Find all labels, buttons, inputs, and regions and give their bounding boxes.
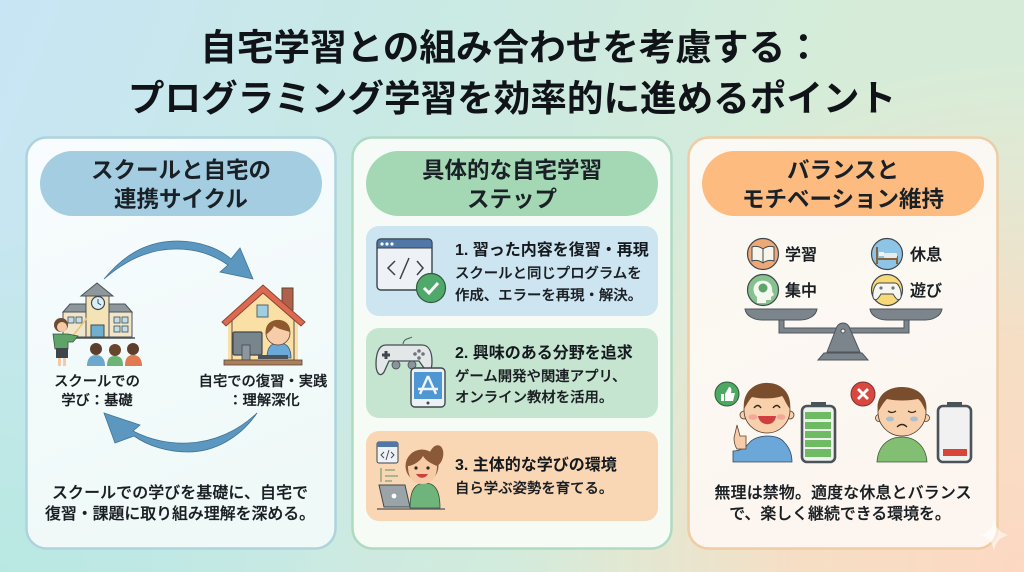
card: step 3 <box>366 431 658 521</box>
arrow: school to home <box>104 241 253 279</box>
label: play: 遊び <box>910 282 942 300</box>
label: review at home: ：理解深化 <box>228 392 300 409</box>
text: balance summary: で、楽しく継続できる環境を。 <box>729 505 951 523</box>
heading pill: cycle: 連携サイクル <box>114 187 248 212</box>
label: learning at school <box>54 373 140 409</box>
text: balance summary <box>714 484 972 523</box>
text: cycle summary: スクールでの学びを基礎に、自宅で <box>52 484 308 502</box>
icon: focus head <box>748 274 778 306</box>
icon: study book <box>748 238 778 270</box>
figure: tired child with low battery <box>851 382 971 462</box>
label: study: 学習 <box>785 246 817 264</box>
panel: balance and motivation <box>688 138 998 548</box>
text: step 1: 1. 習った内容を復習・再現 <box>455 240 649 259</box>
heading pill: steps <box>366 151 658 216</box>
icon: home study <box>222 285 305 365</box>
text: step 2: 2. 興味のある分野を追求 <box>455 343 633 362</box>
text: step 2: オンライン教材を活用。 <box>455 389 613 406</box>
icon: girl with laptop <box>377 442 446 509</box>
heading pill: balance <box>702 151 984 216</box>
card: step 2 <box>366 328 658 418</box>
label: learning at school: スクールでの <box>54 373 140 390</box>
label: learning at school: 学び：基礎 <box>61 392 133 409</box>
text: step 1 <box>455 240 649 304</box>
heading pill: balance: バランスと <box>787 158 899 183</box>
card: step 1 <box>366 226 658 316</box>
text: step 2 <box>455 343 633 406</box>
icon: school with teacher and students <box>53 283 142 366</box>
heading pill: cycle <box>40 151 322 216</box>
text: step 3: 3. 主体的な学びの環境 <box>455 455 617 474</box>
icon: rest bed <box>872 238 902 270</box>
text: cycle summary <box>45 484 315 523</box>
arrow: home to school <box>104 413 257 452</box>
label: focus: 集中 <box>785 282 817 300</box>
icon: play controller <box>872 274 902 306</box>
label: review at home: 自宅での復習・実践 <box>199 373 327 390</box>
icon: sparkle mark <box>979 518 1009 552</box>
panel: concrete home study steps <box>352 138 672 548</box>
icon: balance scale <box>745 309 942 360</box>
text: step 3 <box>455 455 617 497</box>
text: step 1: 作成、エラーを再現・解決。 <box>455 287 642 304</box>
label: rest: 休息 <box>910 246 942 264</box>
text: step 1: スクールと同じプログラムを <box>455 265 642 282</box>
title: プログラミング学習を効率的に進めるポイント <box>128 78 896 119</box>
heading pill: steps: 具体的な自宅学習 <box>422 158 602 183</box>
icon: code window with check <box>377 239 446 302</box>
title <box>128 27 896 119</box>
label: review at home <box>199 373 327 409</box>
icon: game controller and app tablet <box>376 337 445 407</box>
figure: happy child with full battery <box>715 382 835 462</box>
title: 自宅学習との組み合わせを考慮する： <box>200 27 822 68</box>
panel: school and home cycle <box>26 138 336 548</box>
text: cycle summary: 復習・課題に取り組み理解を深める。 <box>45 505 315 523</box>
text: step 3: 自ら学ぶ姿勢を育てる。 <box>455 480 613 497</box>
text: step 2: ゲーム開発や関連アプリ、 <box>455 368 626 385</box>
heading pill: steps: ステップ <box>467 187 557 212</box>
heading pill: cycle: スクールと自宅の <box>91 158 271 183</box>
text: balance summary: 無理は禁物。適度な休息とバランス <box>714 484 972 502</box>
heading pill: balance: モチベーション維持 <box>742 187 944 212</box>
